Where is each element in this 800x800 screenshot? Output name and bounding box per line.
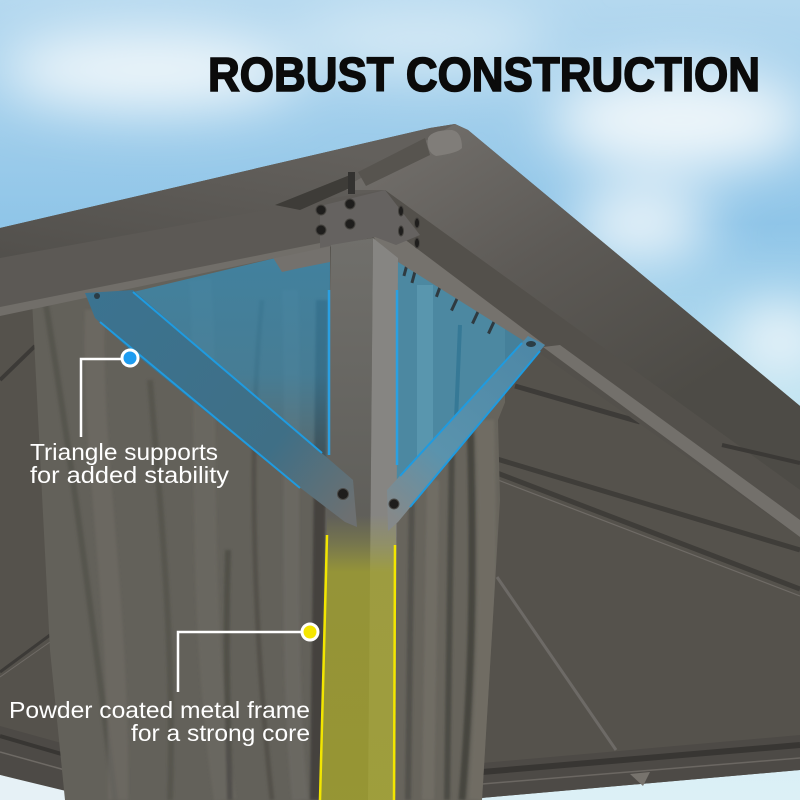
corner bracket with holes — [316, 190, 420, 248]
bottom frame left — [0, 726, 65, 793]
label: triangle supports: Triangle supports — [30, 439, 218, 465]
marker yellow — [302, 624, 318, 640]
curtain valance — [272, 245, 330, 272]
post — [320, 238, 398, 800]
callout: triangle supports — [30, 350, 229, 488]
curtains left blue highlight — [100, 245, 330, 480]
callout: powder coated frame — [9, 624, 318, 746]
roof rafter and end cap — [275, 130, 462, 210]
beam right lower edge — [372, 226, 545, 348]
post yellow edge lines — [320, 535, 395, 800]
roof overhang right — [340, 124, 800, 490]
label: powder coated frame: Powder coated metal frame — [9, 697, 310, 723]
title: ROBUST CONSTRUCTION — [208, 49, 760, 102]
beam right — [375, 190, 800, 537]
curtains right — [395, 262, 524, 800]
beam left — [0, 190, 400, 316]
label: powder coated frame: for a strong core — [131, 720, 310, 746]
label: triangle supports: for added stability — [30, 462, 229, 488]
roof top fascia left — [0, 124, 455, 315]
left triangle support — [85, 290, 357, 527]
marker blue — [122, 350, 138, 366]
bottom frame right — [481, 735, 800, 798]
right triangle support — [387, 336, 545, 531]
sky corner bottom left — [0, 775, 68, 800]
curtain hooks — [402, 264, 496, 334]
post yellow highlight — [320, 515, 396, 800]
leader line blue — [81, 359, 122, 437]
curtains left — [30, 230, 330, 800]
purlin lines right — [0, 346, 800, 750]
leader line yellow — [178, 632, 301, 692]
post blue edge lines — [329, 290, 397, 465]
